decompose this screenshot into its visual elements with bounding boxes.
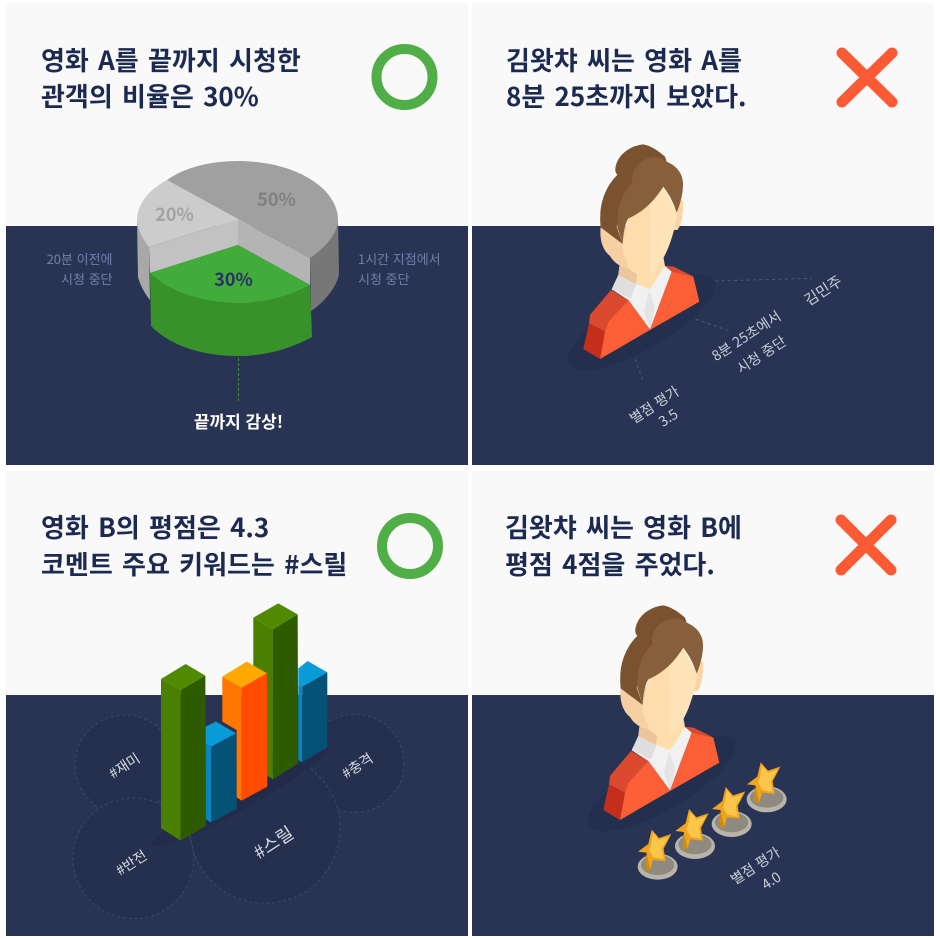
label: star rating: 별점 평가 xyxy=(727,842,784,889)
label: watched to the end: 끝까지 감상! xyxy=(194,408,283,433)
label: rating value: 3.5 xyxy=(655,404,682,431)
icon: orange X wrong xyxy=(842,53,892,102)
label: name: 김민주 xyxy=(800,270,846,310)
heading: movie A ratio: 영화 A를 끝까지 시청한 xyxy=(41,41,301,78)
icon: green circle correct xyxy=(382,518,438,574)
label: stopped at 8:25: 8분 25초에서 xyxy=(708,306,785,366)
keyword: twist: #반전 xyxy=(112,845,151,880)
person illustration xyxy=(576,605,748,848)
panel: Kim Watcha movie B xyxy=(472,470,934,936)
label: at 1 hour: 시청 중단 xyxy=(358,269,410,288)
person illustration xyxy=(556,144,812,387)
label: stopped watching: 시청 중단 xyxy=(733,331,790,378)
label: before 20 minutes: 시청 중단 xyxy=(61,269,113,288)
heading: Kim Watcha watched: 김왓챠 씨는 영화 A를 xyxy=(506,41,742,78)
heading: movie B rating: 영화 B의 평점은 4.3 xyxy=(41,508,269,545)
keyword: shock: #충격 xyxy=(338,748,377,783)
heading: Kim Watcha rating: 평점 4점을 주었다. xyxy=(505,545,715,582)
pie label 30%: 30% xyxy=(214,266,253,292)
four star badges xyxy=(638,762,787,880)
icon: orange X wrong xyxy=(841,520,891,570)
pie chart xyxy=(137,161,339,356)
heading: Kim Watcha rating: 김왓챠 씨는 영화 B에 xyxy=(505,508,742,545)
pie label 50%: 50% xyxy=(257,186,296,212)
keyword: thrill: #스릴 xyxy=(248,819,298,865)
keyword: fun: #재미 xyxy=(105,748,144,783)
heading: movie B rating: 코멘트 주요 키워드는 #스릴 xyxy=(41,545,347,582)
label: star rating: 별점 평가 xyxy=(626,381,683,428)
label: rating value: 4.0 xyxy=(758,867,785,894)
label: at 1 hour: 1시간 지점에서 xyxy=(358,249,441,268)
bar chart with keyword circles xyxy=(73,603,404,919)
label: before 20 minutes: 20분 이전에 xyxy=(47,249,112,268)
heading: movie A ratio: 관객의 비율은 30% xyxy=(41,77,259,114)
panel: movie B keywords xyxy=(6,470,468,936)
pie label 20%: 20% xyxy=(155,201,194,227)
heading: Kim Watcha watched: 8분 25초까지 보았다. xyxy=(506,77,746,114)
panel: movie A audience ratio xyxy=(6,3,468,465)
panel: Kim Watcha movie A xyxy=(472,3,934,465)
icon: green circle correct xyxy=(376,49,432,105)
